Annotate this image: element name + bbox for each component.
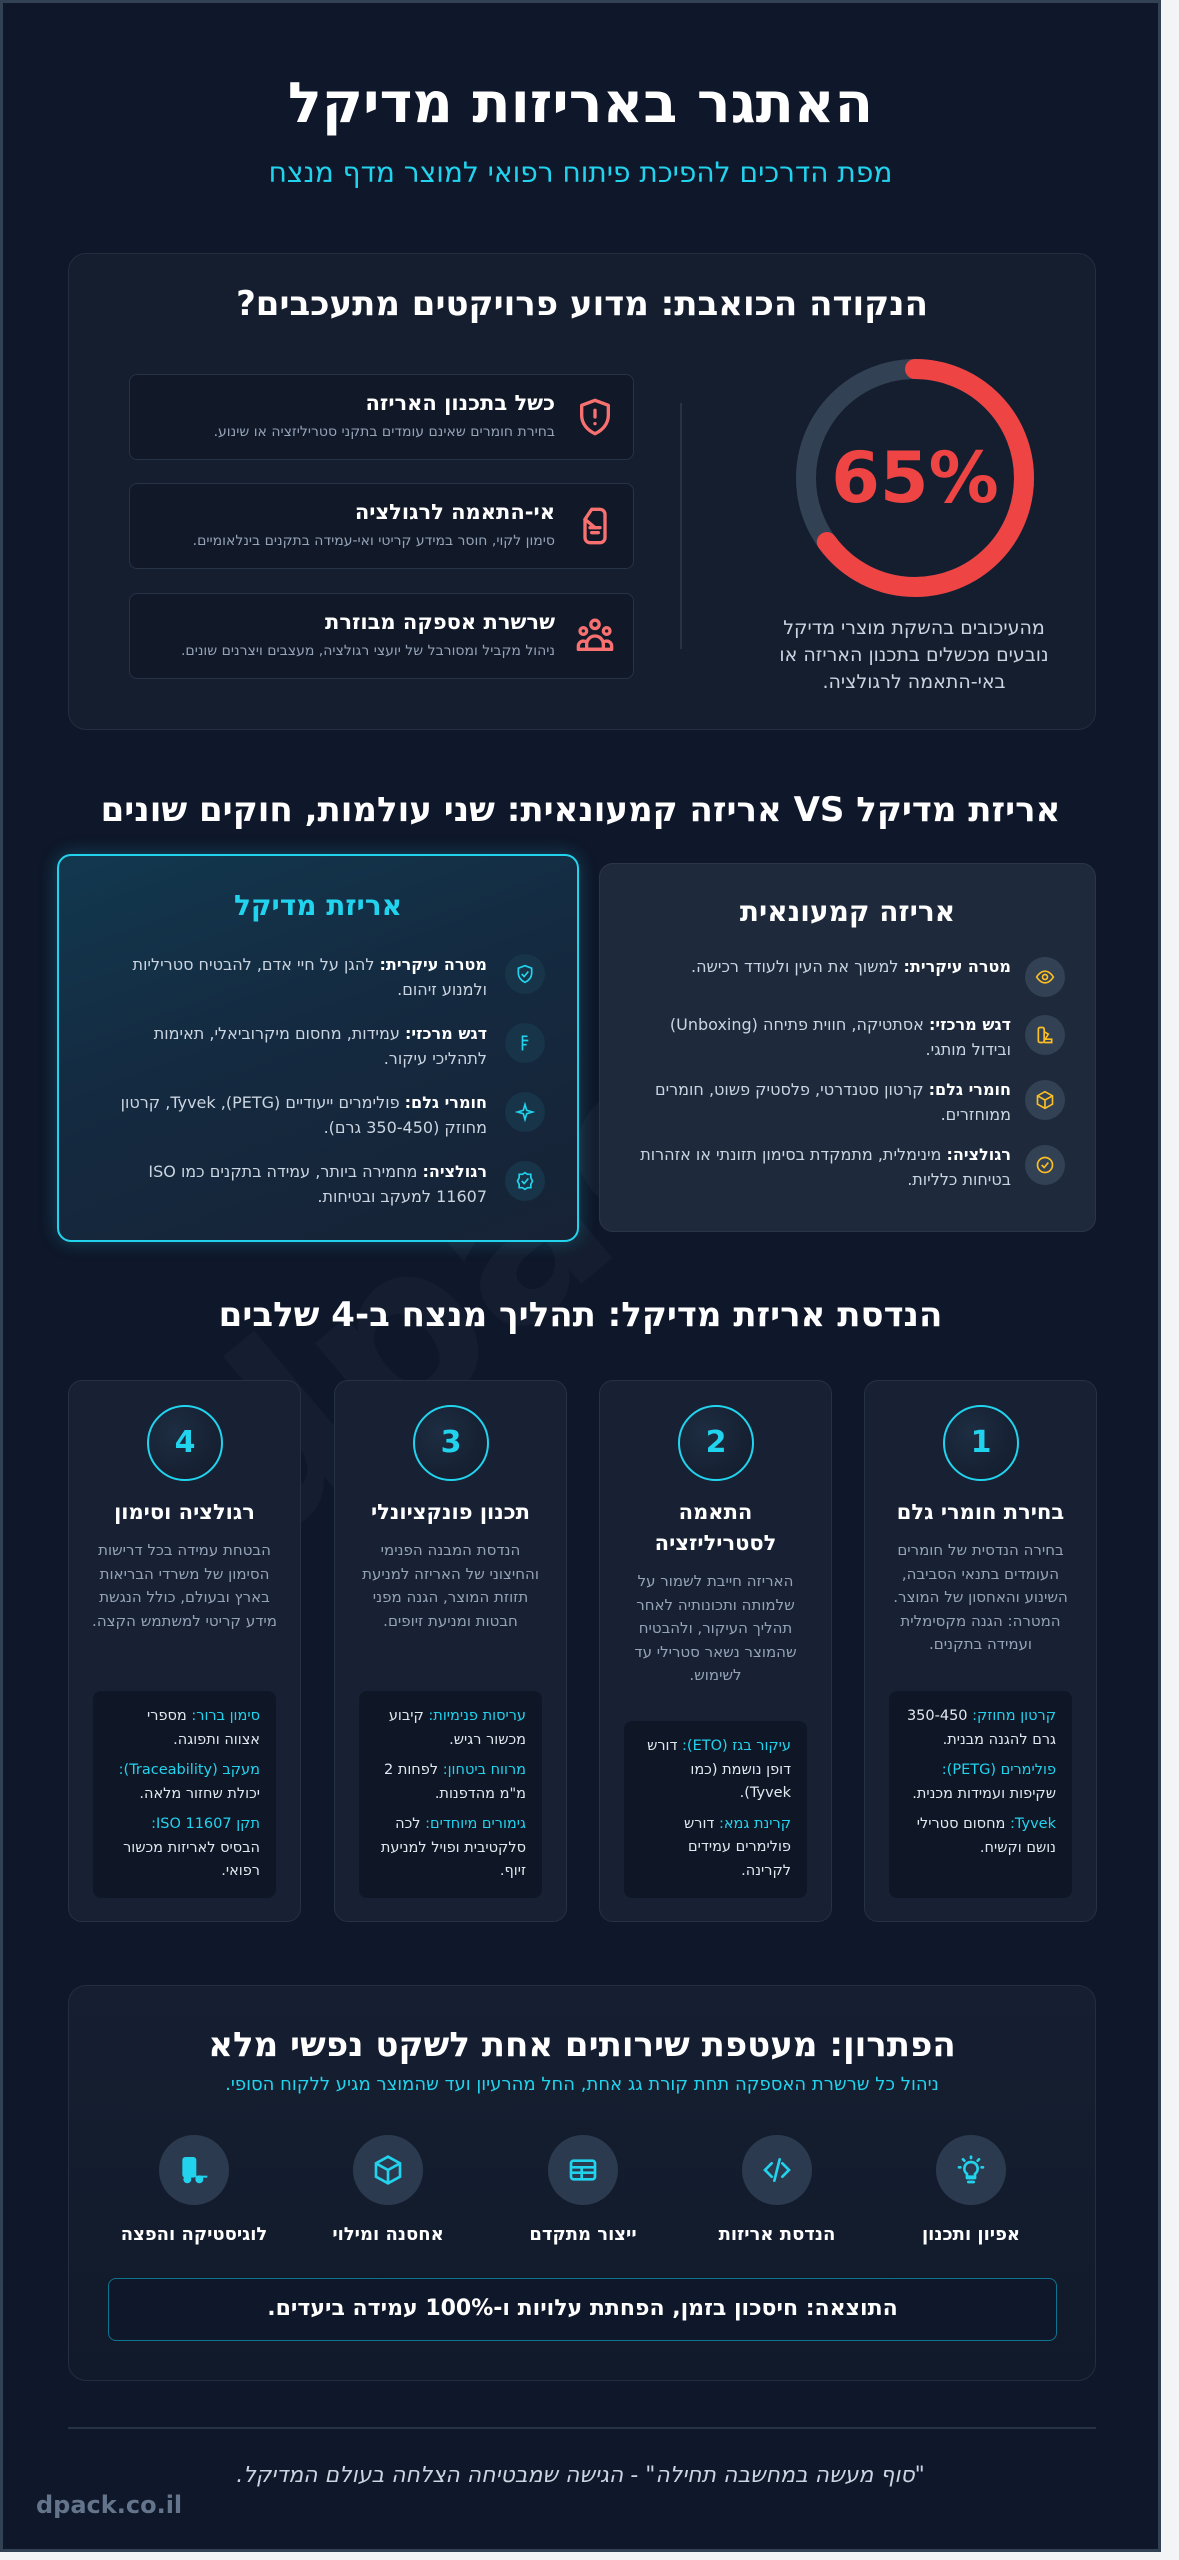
text: regulation: רגולציה: מחמירה ביותר, עמידה בתקנים כמו ISO 11607 למעקב ובטיחות.	[148, 1162, 487, 1206]
icon: tool	[505, 1023, 545, 1063]
step 3: מרווח ביטחון: לפחות 2 מ"מ מהדפנות.	[384, 1762, 526, 1802]
step 1: קרטון מחוזק: 350-450 גרם להגנה מבנית.	[907, 1708, 1056, 1748]
card: packaging design failure: כשל בתכנון האריזה	[365, 391, 555, 415]
divider	[68, 2427, 1096, 2428]
step 4: רגולציה וסימון	[114, 1500, 255, 1524]
step 3: הנדסת המבנה הפנימי והחיצוני של האריזה למניעת תזוזת המוצר, הגנה מפני חבטות ומניעת זיופים.	[362, 1541, 539, 1630]
icon: eye	[1025, 957, 1065, 997]
icon: box	[1025, 1080, 1065, 1120]
step 1: 1	[971, 1425, 991, 1460]
heading: commercial: אריזה קמעונאית	[740, 895, 955, 928]
card: regulation mismatch	[129, 483, 634, 569]
heading: solution: הפתרון: מעטפת שירותים אחת לשקט נפשי מלא	[208, 2025, 956, 2065]
callout: result: התוצאה: חיסכון בזמן, הפחתת עלויות ו-100% עמידה ביעדים.	[267, 2296, 898, 2321]
icon: production	[548, 2135, 618, 2205]
title: האתגר באריזות מדיקל	[288, 71, 873, 136]
label: engineering: הנדסת אריזות	[719, 2224, 835, 2245]
card: fragmented supply chain	[129, 593, 634, 679]
icon: shield	[505, 954, 545, 994]
icon: code	[742, 2135, 812, 2205]
icon: box	[353, 2135, 423, 2205]
icon: truck	[159, 2135, 229, 2205]
step 1: בחירת חומרי גלם	[897, 1500, 1064, 1524]
heading: medical vs commercial: אריזת מדיקל VS אריזה קמעונאית: שני עולמות, חוקים שונים	[101, 790, 1060, 830]
watermark: dpack.	[119, 842, 950, 1600]
text: materials: חומרי גלם: קרטון סטנדרטי, פלסטיק פשוט, חומרים ממוחזרים.	[655, 1080, 1011, 1124]
text: focus: דגש מרכזי: עמידות, מחסום מיקרוביאלי, תאימות לתהליכי עיקור.	[154, 1024, 487, 1068]
icon: document	[583, 508, 607, 544]
card: packaging design failure: בחירת חומרים שאינם עומדים בתקני סטריליזציה או שינוע.	[214, 424, 555, 440]
card: regulation mismatch: סימון לקוי, חוסר במידע קריטי ואי-עמידה בתקנים בינלאומיים.	[193, 533, 555, 549]
icon: people	[576, 618, 614, 651]
text: ring caption: מהעיכובים בהשקת מוצרי מדיקל נובעים מכשלים בתכנון האריזה או באי-התאמה לרגולציה.	[779, 617, 1049, 693]
text: goal: מטרה עיקרית: למשוך את העין ולעודד רכישה.	[691, 957, 1011, 976]
panel: medical packaging	[57, 854, 579, 1242]
card: fragmented supply chain: שרשרת אספקה מבוזרת	[325, 610, 555, 634]
step 4: 4	[175, 1425, 195, 1460]
panel: pain point	[68, 253, 1096, 730]
icon: bulb	[936, 2135, 1006, 2205]
step 2: לסטריליזציה	[655, 1531, 776, 1555]
step 1: בחירה הנדסית של חומרים העומדים בתנאי הסביבה, השינוע והאחסון של המוצר. המטרה: הגנה מקסימלית ועמידה בתקנים.	[893, 1541, 1068, 1653]
icon: badge	[505, 1161, 545, 1201]
icon: shield alert	[580, 398, 610, 436]
step 4: סימון ברור: מספרי אצווה ותפוגה.	[147, 1708, 260, 1748]
panel: solution	[68, 1985, 1096, 2381]
card: regulation mismatch: אי-התאמה לרגולציה	[355, 500, 555, 524]
step 1: Tyvek: מחסום סטרילי נושם וקשיח.	[917, 1816, 1056, 1856]
step 4: תקן ISO 11607: הבסיס לאריזות מכשור רפואי.	[123, 1816, 260, 1879]
text: regulation: רגולציה: מינימלית, מתמקדת בסימון תזונתי או אזהרות בטיחות כלליות.	[640, 1145, 1011, 1189]
subtitle: solution: ניהול כל שרשרת האספקה תחת קורת גג אחת, החל מהרעיון ועד שהמוצר מגיע ללקוח הסופי.	[225, 2074, 939, 2095]
card: packaging design failure	[129, 374, 634, 460]
step 4	[68, 1380, 301, 1922]
step 3: עריסות פנימיות: קיבוע מכשור רגיש.	[389, 1708, 526, 1748]
label: production: ייצור מתקדם	[529, 2224, 637, 2245]
icon: palette	[1025, 1015, 1065, 1055]
step 3: תכנון פונקציונלי	[371, 1500, 530, 1524]
step 1	[864, 1380, 1097, 1922]
panel: commercial packaging	[599, 863, 1096, 1232]
brand: dpack.co.il	[36, 2491, 182, 2519]
chart: 65% ring	[796, 359, 1034, 597]
text: materials: חומרי גלם: פולימרים ייעודיים (PETG), Tyvek, קרטון מחוזק (350-450 גרם).	[121, 1093, 487, 1137]
step 3: 3	[441, 1425, 461, 1460]
text: goal: מטרה עיקרית: להגן על חיי אדם, להבטיח סטריליות ולמנוע זיהום.	[133, 955, 487, 999]
icon: sparkle	[505, 1092, 545, 1132]
icon: check	[1025, 1145, 1065, 1185]
label: storage: אחסנה ומילוי	[332, 2224, 444, 2245]
step 2: קרינת גמא: דורש פולימרים עמידים לקרינה.	[684, 1816, 791, 1878]
step 2: התאמה	[679, 1500, 752, 1524]
step 2: 2	[706, 1425, 726, 1460]
quote: "סוף מעשה במחשבה תחילה" - הגישה שמבטיחה הצלחה בעולם המדיקל.	[236, 2463, 925, 2488]
chart: 65% ring: 65%	[831, 437, 999, 519]
heading: 4 steps: הנדסת אריזת מדיקל: תהליך מנצח ב-4 שלבים	[219, 1295, 942, 1335]
step 4: הבטחת עמידה בכל דרישות הסימון של משרדי הבריאות בארץ ובעולם, כולל הנגשת מידע קריטי למשתמש הקצה.	[92, 1541, 277, 1630]
subtitle: מפת הדרכים להפיכת פיתוח רפואי למוצר מדף מנצח	[269, 156, 892, 189]
step 3: גימורים מיוחדים: לכה סלקטיבית ופויל למניעת זיוף.	[381, 1816, 526, 1879]
divider	[680, 403, 682, 649]
text: focus: דגש מרכזי: אסתטיקה, חווית פתיחה (Unboxing) ובידול מותגי.	[670, 1015, 1011, 1059]
step 2	[599, 1380, 832, 1922]
label: logistics: לוגיסטיקה והפצה	[121, 2224, 267, 2245]
label: ideation: אפיון ותכנון	[922, 2224, 1020, 2245]
step 1: פולימרים (PETG): שקיפות ועמידות מכנית.	[912, 1762, 1056, 1802]
step 3	[334, 1380, 567, 1922]
heading: medical: אריזת מדיקל	[234, 889, 402, 922]
step 4: מעקב (Traceability): יכולת שחזור מלאה.	[119, 1762, 260, 1802]
callout: result	[108, 2278, 1057, 2341]
step 2: עיקור בגז (ETO): דורש דופן נושמת (כמו Tyvek).	[647, 1738, 791, 1801]
card: fragmented supply chain: ניהול מקביל ומסורבל של יועצי רגולציה, מעצבים ויצרנים שונים.	[181, 643, 555, 659]
step 2: האריזה חייבת לשמור על שלמותה ותכונותיה לאחר תהליך העיקור, ולהבטיח שהמוצר נשאר סטרילי עד לשימוש.	[634, 1572, 797, 1684]
heading: pain point: הנקודה הכואבת: מדוע פרויקטים מתעכבים?	[236, 284, 928, 324]
